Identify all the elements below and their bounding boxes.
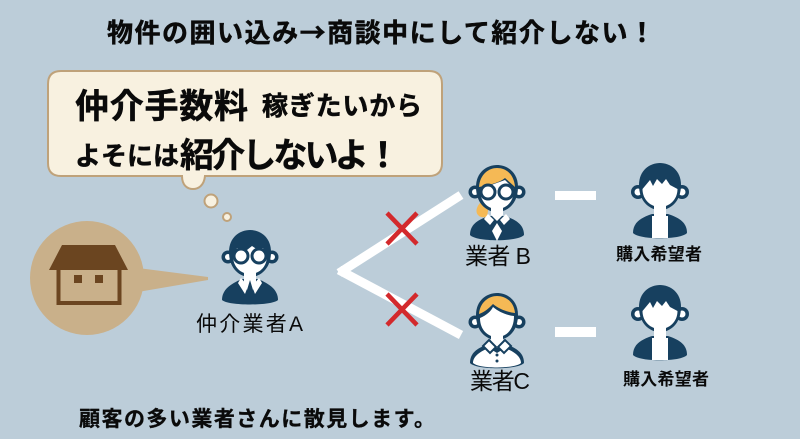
bubble text line 2: よそには bbox=[75, 136, 179, 173]
thought dot small bbox=[223, 213, 231, 221]
title: 物件の囲い込み→商談中にして紹介しない！ bbox=[107, 13, 655, 50]
speech bubble bbox=[48, 71, 442, 221]
footer note: 顧客の多い業者さんに散見します。 bbox=[79, 403, 435, 433]
icon: agent C bbox=[468, 293, 526, 368]
icon: agent B bbox=[468, 165, 526, 241]
bubble text line 2 bbox=[75, 128, 400, 177]
label: agent B: 業者 B bbox=[465, 243, 531, 269]
icon: red cross lower bbox=[387, 294, 417, 325]
arrow line to agent B bbox=[339, 195, 461, 273]
bubble text line 1: 仲介手数料 bbox=[75, 79, 248, 128]
icon: buyer upper bbox=[631, 163, 689, 238]
label: buyer lower: 購入希望者 bbox=[623, 369, 709, 389]
bubble text line 1: 稼ぎたいから bbox=[262, 86, 422, 123]
label: buyer upper: 購入希望者 bbox=[616, 244, 702, 264]
thought dot large bbox=[204, 194, 218, 208]
icon: agent A bbox=[222, 230, 278, 304]
arrow line to agent C bbox=[339, 270, 461, 335]
icon: buyer lower bbox=[631, 285, 689, 360]
dash upper bbox=[555, 191, 596, 200]
bubble text line 2: 紹介しないよ！ bbox=[180, 128, 400, 177]
label: agent C: 業者C bbox=[470, 368, 530, 394]
dash lower bbox=[555, 327, 596, 337]
icon: red cross upper bbox=[387, 213, 417, 244]
icon: house in speech circle bbox=[30, 221, 208, 335]
label: agent A: 仲介業者A bbox=[196, 313, 303, 336]
bubble body bbox=[48, 71, 442, 189]
bubble text line 1 bbox=[75, 79, 422, 128]
